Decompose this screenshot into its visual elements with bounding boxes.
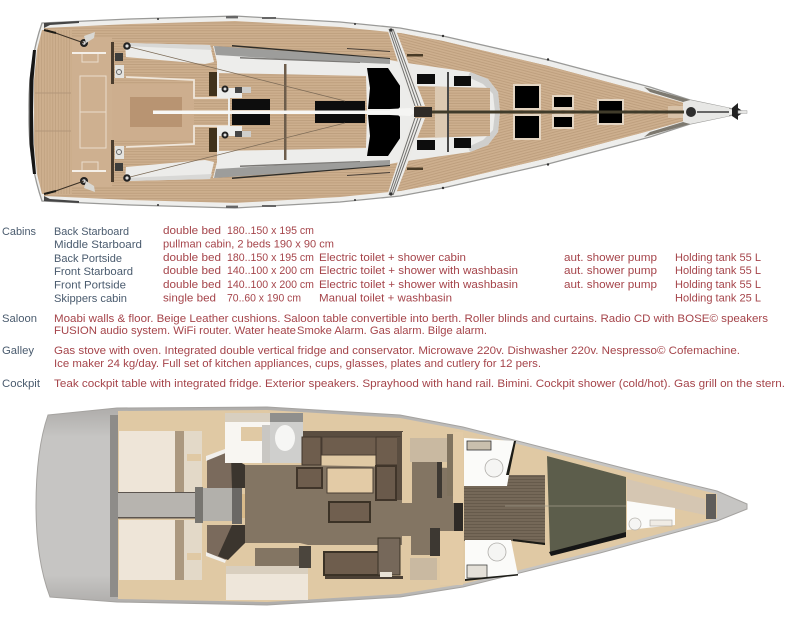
- section: cabins: aut. shower pump: [564, 252, 657, 264]
- section: galley: Galley: [2, 345, 35, 357]
- section: cabins: Electric toilet + shower with washbasin: [319, 279, 518, 291]
- saloon sofa top: [297, 431, 403, 500]
- aft starboard bed: [119, 431, 175, 492]
- section: cockpit: Teak cockpit table with integrated fridge. Exterior speakers. Sprayhood with hand rail. Bimini. Cockpit shower (cold/hot). Gas grill on the stern.: [54, 378, 785, 390]
- section: cabins: Skippers cabin: [54, 293, 127, 305]
- cockpit table recess: [130, 97, 182, 127]
- interior layout plan: [36, 407, 747, 605]
- section: cabins: Manual toilet + washbasin: [319, 292, 452, 304]
- section: cabins: double bed: [163, 225, 221, 237]
- section: cabins: 180..150 x 195 cm: [227, 252, 314, 264]
- hull outline: [29, 16, 747, 208]
- aft port bed: [119, 520, 175, 580]
- section: galley: Gas stove with oven. Integrated double vertical fridge and conservator. Microwave 220v. Dishwasher 220v. Nespresso© Cofemachine.: [54, 345, 740, 357]
- bow windlass: [686, 107, 696, 117]
- section: cabins: pullman cabin, 2 beds 190 x 90 cm: [163, 238, 334, 250]
- saloon table: [327, 468, 373, 493]
- forward passage floor: [464, 475, 545, 545]
- aft lobby floors: [206, 449, 245, 563]
- hull shell: [36, 407, 747, 605]
- ottoman: [329, 502, 370, 522]
- companionway landing: [195, 487, 242, 524]
- forepeak wood: [676, 511, 705, 527]
- skipper cabin head: [627, 501, 675, 530]
- skipper cabin bunk: [627, 479, 705, 515]
- specification text: [2, 225, 785, 390]
- section: cabins: Back Starboard: [54, 226, 129, 238]
- mast base: [390, 108, 416, 116]
- section: cabins: Cabins: [2, 226, 36, 238]
- section: saloon: Saloon: [2, 313, 37, 325]
- section: saloon: [2, 313, 769, 337]
- bow roller: [697, 103, 747, 120]
- mast foot fitting: [414, 107, 432, 117]
- section: cabins: aut. shower pump: [564, 279, 657, 291]
- head: forward portside: [465, 539, 545, 581]
- head: forward starboard: [464, 438, 516, 486]
- section: cockpit: Cockpit: [2, 378, 40, 390]
- section: cabins: 70..60 x 190 cm: [227, 292, 301, 304]
- stern bulkhead: [110, 415, 118, 597]
- boom: [153, 110, 403, 114]
- saloon sofa bottom: [324, 538, 403, 579]
- section: cabins: double bed: [163, 252, 221, 264]
- section: cabins: 140..100 x 200 cm: [227, 265, 314, 277]
- section: cabins: 140..100 x 200 cm: [227, 279, 314, 291]
- section: cabins: double bed: [163, 265, 221, 277]
- section: cabins: Holding tank 55 L: [675, 279, 761, 291]
- forward bulkhead: [706, 494, 716, 519]
- main saloon floor: [245, 465, 455, 545]
- section: cabins: aut. shower pump: [564, 265, 657, 277]
- section: galley: [2, 345, 740, 370]
- section: cabins: Front Portside: [54, 280, 126, 292]
- section: galley: Ice maker 24 kg/day. Full set of kitchen appliances, cups, glasses, plates and cutlery for 12 pers.: [54, 358, 541, 370]
- section: cabins: [2, 225, 761, 305]
- section: cabins: Electric toilet + shower with washbasin: [319, 265, 518, 277]
- galley bench: [226, 546, 323, 600]
- section: cabins: Middle Starboard: [54, 239, 142, 251]
- section: cabins: double bed: [163, 279, 221, 291]
- section: saloon: Moabi walls & floor. Beige Leather cushions. Saloon table convertible into berth. Roller blinds and curtains. Radio CD with BOSE© speakers: [54, 313, 769, 325]
- section: cabins: 180..150 x 195 cm: [227, 225, 314, 237]
- section: cabins: Holding tank 25 L: [675, 292, 761, 304]
- galley corridor: [400, 462, 463, 556]
- deck plan (top view of yacht): [29, 16, 747, 208]
- interior wood base: [118, 410, 717, 602]
- section: cabins: single bed: [163, 292, 216, 304]
- head compartment: aft starboard: [225, 413, 303, 463]
- section: cabins: Back Portside: [54, 253, 122, 265]
- section: cabins: Front Starboard: [54, 266, 133, 278]
- section: cabins: Holding tank 55 L: [675, 252, 761, 264]
- section: saloon: FUSION audio system. WiFi router. Water heate: [54, 325, 296, 337]
- aft bed side panels: [118, 431, 202, 580]
- section: saloon: Smoke Alarm. Gas alarm. Bilge alarm.: [297, 325, 487, 337]
- section: cabins: Holding tank 55 L: [675, 265, 761, 277]
- forestay track: [414, 110, 684, 114]
- companionway steps: [242, 494, 280, 518]
- galley cabinets: [402, 432, 463, 585]
- forward cabin berth: [505, 456, 626, 556]
- deck: starboard half: [30, 16, 729, 112]
- aft corridor: [118, 493, 196, 517]
- section: cabins: Electric toilet + shower cabin: [319, 252, 466, 264]
- deck: port half: [30, 112, 729, 208]
